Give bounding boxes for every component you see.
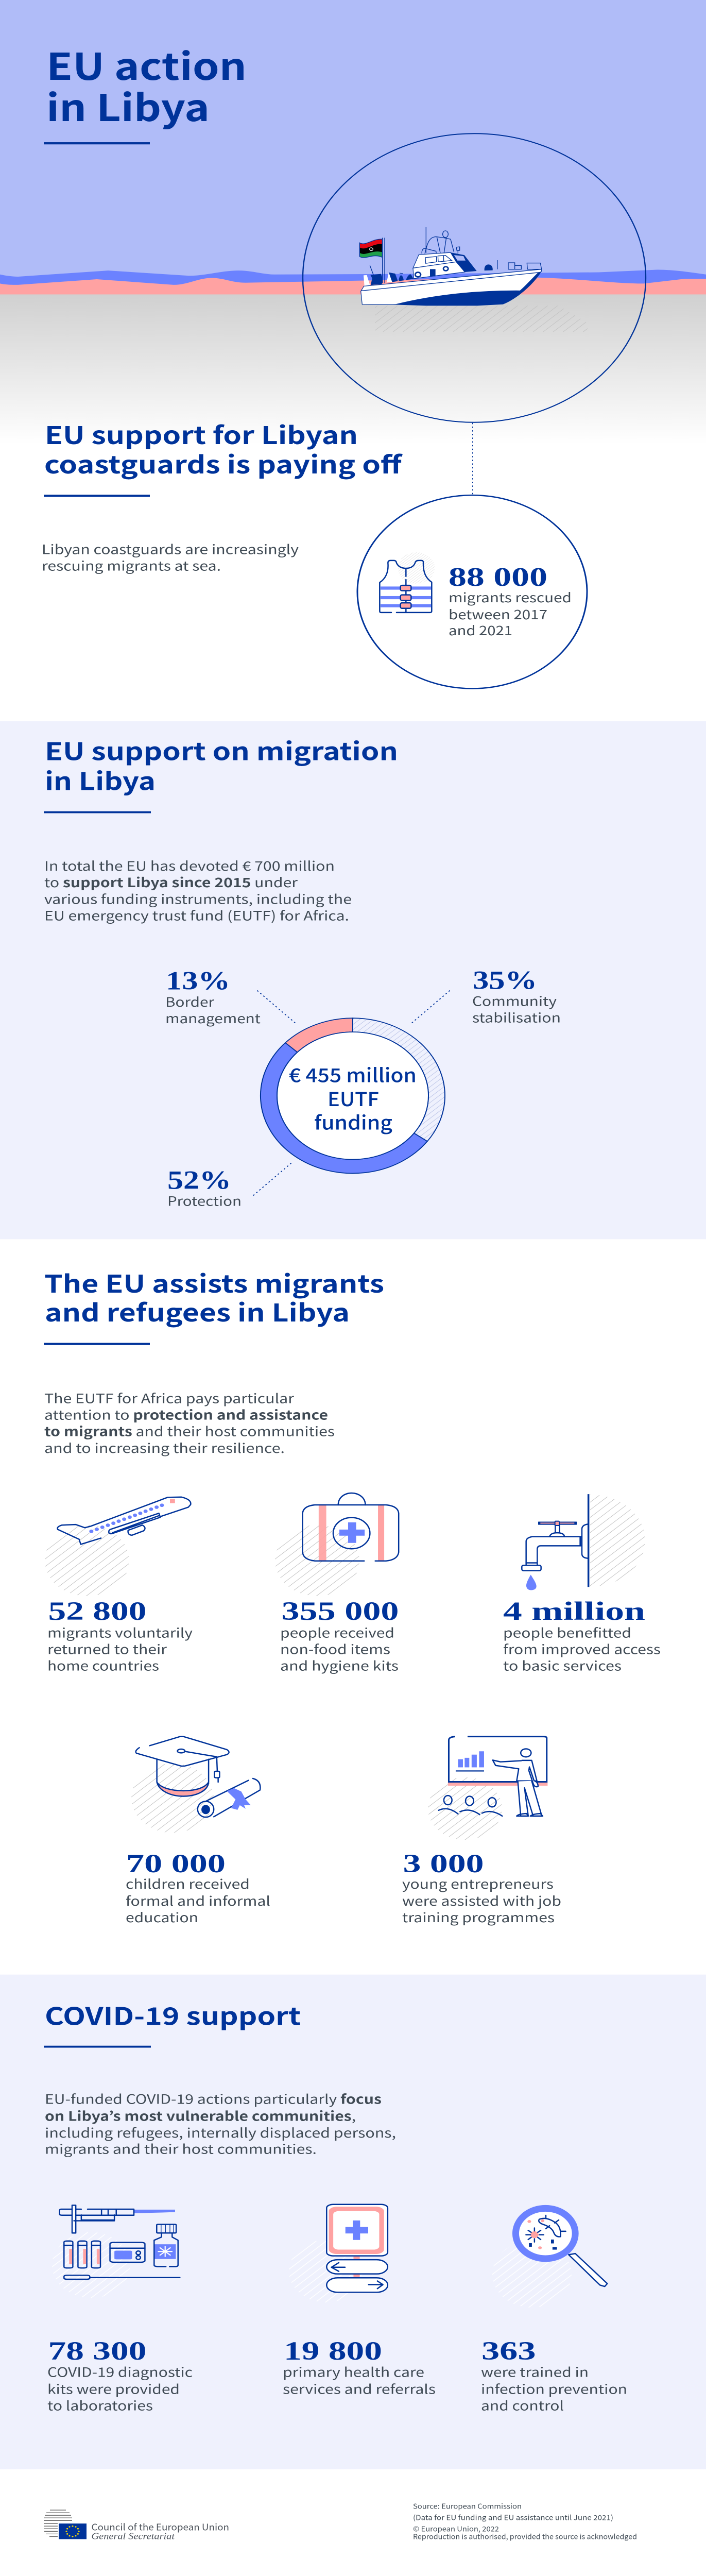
icon: health care signpost [289,2205,388,2302]
heading [44,416,403,481]
source and copyright [413,2501,637,2541]
heading [44,1264,384,1329]
heading: EU support for Libyan [45,416,358,451]
heading rule [44,2046,151,2047]
stat: 52 800: home countries [47,1656,159,1674]
title: in Libya [46,78,210,132]
stat: 19 800 [283,2336,436,2398]
large circle around boat [303,133,646,422]
logo: Council of the European Union [44,2510,229,2541]
intro text: to support Libya since 2015 under [44,872,298,891]
label: 52% protection: Protection [167,1191,242,1210]
stat: 3 000: young entrepreneurs [402,1874,554,1892]
stat: 78 300: COVID-19 diagnostic [47,2362,193,2381]
stat: 78 300: kits were provided [47,2379,180,2398]
label: 35% community stabilisation: Community [472,991,557,1010]
grey gradient floor [0,294,706,444]
source and copyright: Source: European Commission [413,2501,522,2511]
heading rule [44,1343,150,1345]
panel: hero [0,0,706,444]
icon: aeroplane [45,1497,191,1596]
label: 13% border management: Border [165,992,214,1011]
intro text: Libyan coastguards are increasingly [42,539,299,558]
intro text: including refugees, internally displaced persons, [45,2123,396,2141]
intro text: to migrants and their host communities [44,1421,335,1440]
intro text: EU emergency trust fund (EUTF) for Africa. [44,906,349,924]
stat: 70 000: education [126,1907,198,1926]
stat: 355 000 [280,1597,399,1674]
source and copyright: (Data for EU funding and EU assistance until June 2021) [413,2513,613,2522]
label: 35% community stabilisation: stabilisation [472,1007,561,1026]
panel: COVID-19 support [0,1975,706,2469]
intro text: various funding instruments, including the [44,889,352,908]
stat: 355 000: non-food items [280,1639,390,1658]
boat cabin [413,252,456,268]
label: 35% community stabilisation [472,966,561,1026]
stat: 19 800: services and referrals [283,2379,436,2398]
icon: diagnostic kit [52,2205,180,2298]
intro text: on Libya’s most vulnerable communities, [45,2106,356,2125]
stat: 70 000: formal and informal [126,1891,270,1909]
intro text: attention to protection and assistance [44,1404,328,1423]
heading: COVID-19 support [45,1997,301,2032]
stat: 4 million: 4 million [503,1597,645,1625]
stat: 3 000 [402,1849,561,1926]
icon: Libyan flag [359,238,385,283]
donut chart [261,1018,445,1173]
label: 13% border management [165,967,261,1027]
title rule [44,142,150,144]
dotted leaders [251,991,450,1197]
segment: 52% protection [261,1043,427,1173]
title [46,37,247,132]
logo: Council of the European Union: General Secretariat [91,2532,175,2541]
panel: footer [44,2501,637,2541]
segment: 13% border management [285,1018,353,1052]
stat: 363: and control [481,2395,564,2414]
stat: 70 000: 70 000 [126,1849,226,1878]
donut centre: funding [314,1108,392,1135]
boat hull [361,269,542,304]
stat: 355 000: and hygiene kits [280,1656,399,1674]
intro text [45,2089,396,2158]
callout circle: 88 000 rescued [357,495,587,688]
stat: 70 000: children received [126,1874,250,1892]
logo: Council of the European Union: Council of the European Union [91,2520,229,2533]
label: 52% protection: 52% [167,1166,231,1195]
donut centre: € 455 million [289,1060,417,1088]
title: EU action [46,37,247,91]
stat: 3 000: were assisted with job [402,1891,561,1909]
label: 52% protection [167,1166,242,1210]
stat: 19 800: 19 800 [284,2336,382,2365]
donut centre [277,1032,428,1159]
pink wave [0,278,706,295]
icon: life vest [380,552,435,613]
stat: 88 000: migrants rescued [449,587,572,606]
stat: 19 800: primary health care [283,2362,424,2381]
stat: 78 300 [47,2336,193,2414]
heading: and refugees in Libya [45,1294,350,1329]
stat: 52 800: migrants voluntarily [47,1623,193,1641]
intro text: The EUTF for Africa pays particular [44,1388,294,1407]
heading: coastguards is paying off [44,445,403,481]
stat: 355 000: 355 000 [281,1597,399,1625]
stat: 78 300: 78 300 [48,2336,146,2365]
stat: 4 million: from improved access [503,1639,661,1658]
stat: 88 000 [449,562,572,639]
stat: 4 million [503,1597,661,1674]
stat: 4 million: people benefitted [503,1623,631,1641]
stat: 3 000: training programmes [402,1907,555,1926]
donut centre: EUTF [328,1084,379,1112]
icon: first aid kit [275,1493,399,1596]
intro text [44,856,352,924]
label: 35% community stabilisation: 35% [473,966,537,995]
heading: EU support on migration [45,732,398,767]
stat: 88 000: and 2021 [449,620,512,639]
intro text: and to increasing their resilience. [44,1438,285,1457]
section background [0,1975,706,2469]
section background [0,721,706,1239]
label: 13% border management: 13% [166,967,230,995]
intro text [44,1388,335,1457]
dotted connector [472,423,473,495]
intro text: migrants and their host communities. [45,2139,317,2158]
intro text: In total the EU has devoted € 700 million [44,856,335,874]
stat: 88 000: 88 000 [449,562,547,592]
source and copyright: © European Union, 2022 [413,2524,499,2534]
icon: coastguard boat with Libyan flag [359,227,542,306]
stat: 363: were trained in [481,2362,589,2381]
heading rule [44,495,150,497]
stat: 88 000: between 2017 [449,604,547,623]
heading: in Libya [45,762,156,797]
panel: assistance to migrants and refugees [44,1264,661,1926]
intro text: EU-funded COVID-19 actions particularly focus [45,2089,382,2108]
stat: 363: 363 [481,2336,536,2365]
sky background [0,0,706,295]
label: 13% border management: management [165,1008,261,1027]
intro text: rescuing migrants at sea. [42,555,221,574]
panel: coastguards [42,416,587,688]
source and copyright: Reproduction is authorised, provided the source is acknowledged [413,2532,637,2541]
heading rule [44,811,151,813]
intro text [42,539,299,574]
blue wave [0,269,706,295]
icon: trainer with whiteboard and audience [428,1737,547,1840]
panel: EU support on migration [0,721,706,1239]
stat: 363 [481,2336,627,2414]
stat: 52 800 [47,1597,193,1674]
stat: 3 000: 3 000 [403,1849,484,1878]
icon: water tap [522,1494,645,1590]
stat: 4 million: to basic services [503,1656,622,1674]
boat hatch shadow [375,306,588,332]
segment: 35% community stabilisation [353,1018,445,1141]
stat: 70 000 [126,1849,270,1926]
heading [45,732,398,797]
icon: magnifying glass over germs [492,2208,607,2308]
heading: The EU assists migrants [44,1264,384,1299]
stat: 355 000: people received [280,1623,394,1641]
stat: 52 800: returned to their [47,1639,167,1658]
icon: graduation cap and diploma [131,1736,260,1833]
stat: 52 800: 52 800 [48,1597,146,1625]
stat: 78 300: to laboratories [47,2395,153,2414]
stat: 363: infection prevention [481,2379,627,2398]
